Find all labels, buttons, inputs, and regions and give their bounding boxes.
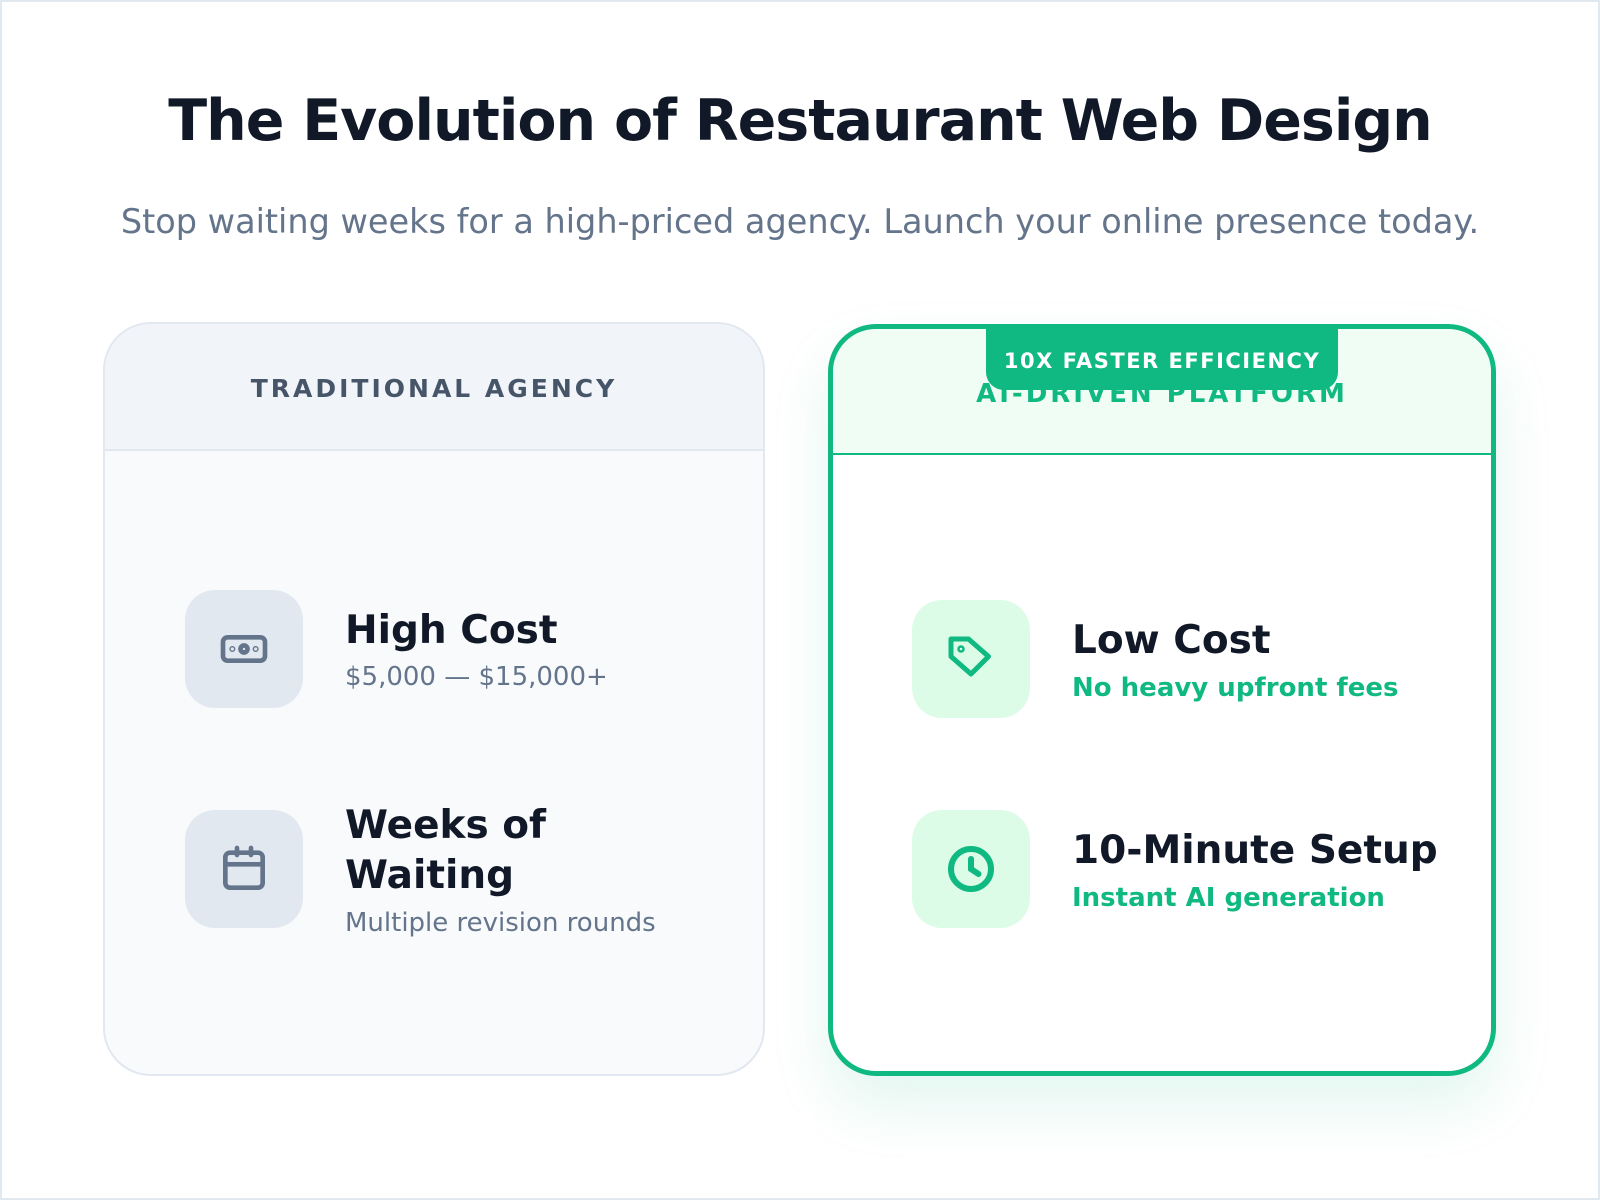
icon: calendar bbox=[185, 810, 303, 928]
text: low cost: No heavy upfront fees bbox=[1072, 673, 1398, 703]
badge: 10x faster efficiency bbox=[986, 326, 1338, 390]
panel: traditional agency bbox=[103, 322, 765, 1076]
icon: clock bbox=[912, 810, 1030, 928]
title: The Evolution of Restaurant Web Design bbox=[168, 88, 1432, 154]
header: ai-driven platform: AI-DRIVEN PLATFORM bbox=[976, 379, 1348, 409]
text: weeks of waiting bbox=[345, 803, 656, 938]
text: low cost bbox=[1072, 618, 1398, 703]
text: 10-minute setup: Instant AI generation bbox=[1072, 883, 1385, 913]
text: high cost: High Cost bbox=[345, 608, 558, 653]
text: 10-minute setup: 10-Minute Setup bbox=[1072, 828, 1438, 873]
panel: ai-driven platform bbox=[828, 324, 1496, 1076]
text: high cost: $5,000 — $15,000+ bbox=[345, 662, 608, 692]
text: low cost: Low Cost bbox=[1072, 618, 1271, 663]
badge: 10x faster efficiency: 10X FASTER EFFICIENCY bbox=[1004, 349, 1320, 373]
text: high cost bbox=[345, 608, 608, 692]
header: traditional agency: TRADITIONAL AGENCY bbox=[251, 374, 617, 403]
text: weeks of waiting: Waiting bbox=[345, 853, 514, 898]
header: traditional agency bbox=[105, 324, 763, 451]
text: weeks of waiting: Weeks of bbox=[345, 803, 546, 848]
header: ai-driven platform bbox=[833, 329, 1491, 455]
text: weeks of waiting: Multiple revision rounds bbox=[345, 908, 656, 938]
text: 10-minute setup bbox=[1072, 828, 1438, 913]
icon: tag bbox=[912, 600, 1030, 718]
subtitle: Stop waiting weeks for a high-priced agency. Launch your online presence today. bbox=[121, 202, 1479, 241]
icon: money bbox=[185, 590, 303, 708]
